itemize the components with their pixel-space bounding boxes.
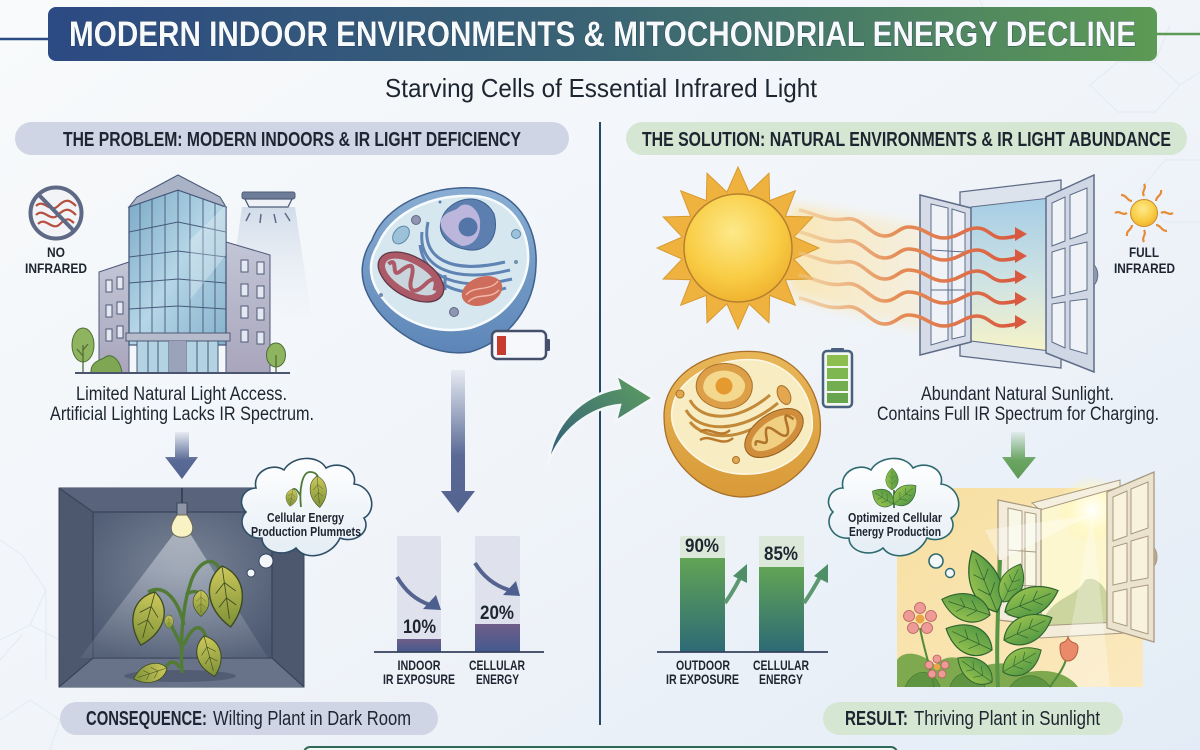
title banner [0, 7, 1200, 61]
garden foliage [897, 654, 1078, 687]
left casement [920, 195, 971, 355]
right sash [1107, 472, 1154, 642]
endoplasmic reticulum [420, 222, 512, 296]
arrow: problem to solution [548, 375, 653, 465]
callout: optimized energy: Energy Production [849, 525, 941, 539]
wave arrowheads [1015, 227, 1027, 329]
text: problem description [50, 384, 314, 425]
right wing [226, 242, 270, 373]
callout: energy plummets: Production Plummets [251, 525, 361, 539]
icon: full infrared [1114, 184, 1175, 276]
golgi [457, 271, 507, 311]
left wing [99, 262, 129, 373]
endoplasmic reticulum [686, 395, 778, 436]
bar: cellular energy 85% [753, 536, 828, 687]
bar: cellular energy 85%: ENERGY [759, 671, 803, 687]
text: solution description [877, 384, 1159, 425]
tower [129, 190, 226, 345]
sun rays [985, 515, 1092, 560]
windows [106, 260, 264, 344]
thought bubbles [259, 554, 273, 568]
panel: the solution [626, 122, 1187, 735]
label: consequence: CONSEQUENCE: [86, 708, 207, 730]
label: result [823, 702, 1123, 735]
light cone [80, 535, 268, 658]
text: problem description: Limited Natural Light Access. [76, 384, 287, 405]
bar: indoor IR exposure 10%: INDOOR [398, 657, 440, 673]
bar: outdoor IR exposure 90%: OUTDOOR [676, 657, 730, 673]
icon: sprout [868, 468, 922, 511]
icon: sun [657, 167, 819, 329]
icon: wilting sprout [284, 472, 328, 508]
mitochondrion [370, 242, 452, 312]
arrow: cell to indoor chart [441, 370, 475, 513]
ground [75, 372, 290, 374]
bar: cellular energy 20%: CELLULAR [469, 657, 525, 673]
bar: cellular energy 20%: ENERGY [476, 671, 519, 687]
callout: optimized energy [828, 458, 959, 556]
bar: cellular energy 85%: 85% [764, 544, 798, 565]
wilting plant [124, 561, 247, 687]
illustration: sunlit room with thriving plant [897, 472, 1157, 691]
right casement [1046, 175, 1094, 372]
illustration: dark room with wilting plant [59, 488, 304, 687]
label: result: RESULT: [845, 708, 908, 730]
left sash [998, 500, 1041, 625]
light bulb [171, 488, 193, 537]
trees [72, 328, 94, 362]
bar chart: indoor [374, 536, 544, 687]
entrance [126, 333, 230, 341]
bar: cellular energy 20%: 20% [480, 603, 514, 624]
bottom conclusion box [304, 747, 897, 750]
banner connector lines [0, 38, 48, 40]
thriving plant [938, 545, 1063, 691]
icon: low battery [492, 331, 550, 359]
icon: full infrared: INFRARED [1114, 260, 1175, 276]
mitochondrion [736, 399, 812, 467]
panel: the problem [15, 122, 569, 735]
label: result: Thriving Plant in Sunlight [914, 708, 1100, 730]
bar: indoor IR exposure 10%: 10% [403, 617, 436, 638]
callout: optimized energy: Optimized Cellular [848, 511, 942, 525]
nucleus [440, 199, 496, 250]
bar: outdoor IR exposure 90%: 90% [685, 536, 719, 557]
bar: cellular energy 85%: CELLULAR [753, 657, 809, 673]
organelles [389, 223, 413, 247]
text: solution description: Abundant Natural Sunlight. [921, 384, 1114, 405]
label: consequence [60, 702, 438, 735]
bar: outdoor IR exposure 90% [666, 536, 747, 687]
heading: the problem: THE PROBLEM: MODERN INDOORS & IR LIGHT DEFICIENCY [63, 129, 522, 151]
icon: no infrared: INFRARED [25, 260, 87, 276]
icon: open window [920, 175, 1098, 372]
sunlit window [998, 472, 1157, 642]
light glow [790, 205, 985, 330]
bar: outdoor IR exposure 90%: IR EXPOSURE [666, 671, 739, 687]
nucleus [696, 363, 752, 409]
thought bubbles [929, 554, 943, 568]
arrow: building to dark room [165, 432, 198, 479]
flowers [904, 602, 1078, 687]
bar chart: outdoor [657, 536, 828, 687]
subtitle: Starving Cells of Essential Infrared Light [385, 73, 818, 103]
infrared waves [799, 210, 1020, 326]
bar: indoor IR exposure 10%: IR EXPOSURE [383, 671, 455, 687]
callout: energy plummets: Cellular Energy [267, 511, 344, 525]
icon: ceiling lamp [226, 192, 312, 320]
heading: the solution [626, 122, 1187, 155]
icon: no infrared: NO [47, 244, 65, 260]
bar: cellular energy 20% [469, 536, 525, 687]
icon: no infrared [25, 188, 87, 276]
icon: office building [72, 175, 290, 373]
icon: charged cell [664, 351, 820, 497]
icon: depleted cell [362, 188, 536, 353]
callout: energy plummets [241, 458, 372, 556]
heading: the problem [15, 122, 569, 155]
bar: indoor IR exposure 10% [383, 536, 455, 687]
text: problem description: Artificial Lighting Lacks IR Spectrum. [50, 404, 314, 425]
icon: full battery [823, 348, 852, 407]
icon: full infrared: FULL [1129, 244, 1159, 260]
arrow: window to sunlit room [1002, 432, 1036, 479]
label: consequence: Wilting Plant in Dark Room [213, 708, 411, 730]
center divider [599, 122, 601, 725]
